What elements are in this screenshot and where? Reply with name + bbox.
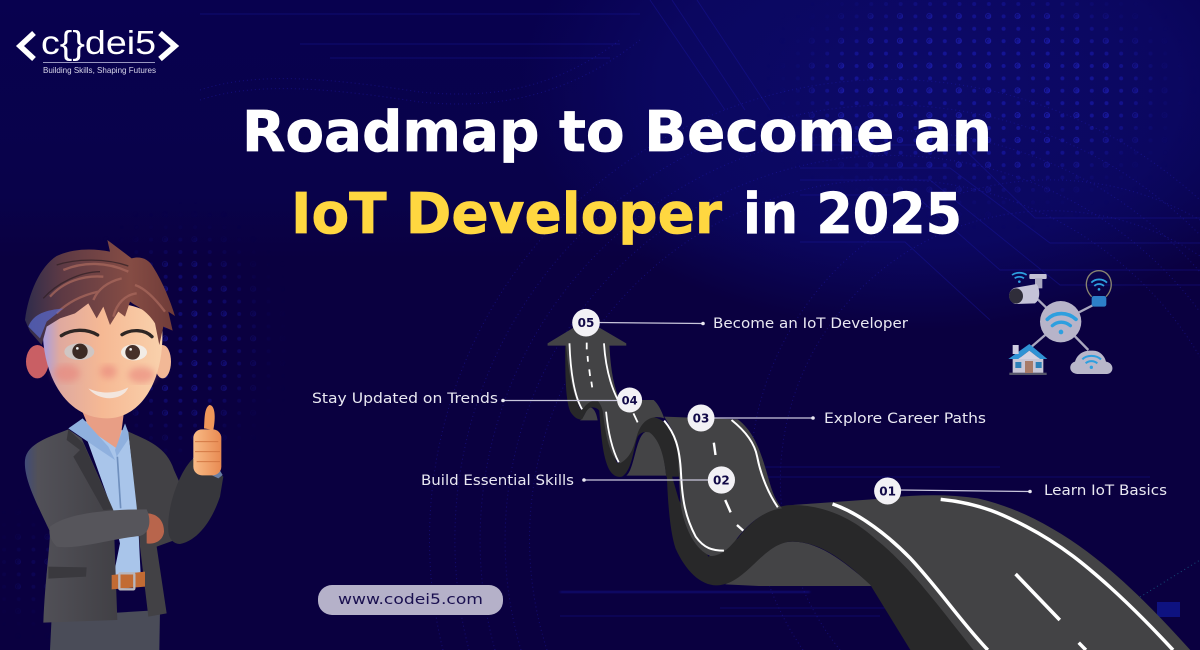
segment 4 surface — [597, 400, 664, 463]
central wifi symbol — [1047, 314, 1076, 334]
house — [1008, 344, 1047, 375]
label: step 01: Learn IoT Basics — [1044, 483, 1167, 499]
label: step 03: Explore Career Paths — [824, 411, 986, 427]
step 01 marker — [874, 478, 901, 504]
mouth — [88, 387, 128, 398]
icon: IoT network — [1008, 271, 1112, 375]
cheeks — [53, 365, 155, 383]
website pill — [318, 585, 503, 615]
step 02 marker — [708, 466, 735, 494]
title: Roadmap to Become an — [242, 100, 992, 165]
pocket flap — [48, 567, 87, 579]
title: IoT Developer — [291, 182, 722, 247]
character: thumbs-up developer — [25, 240, 223, 650]
logo: codei5 — [20, 24, 175, 75]
jacket left — [25, 429, 117, 623]
lane markings — [569, 343, 1173, 650]
step 04 marker: 04 — [622, 393, 638, 407]
logo chevrons and wordmark: c{}dei5 — [41, 24, 156, 61]
thumbs-up hand — [193, 405, 221, 475]
segment 5 surface with arrow head — [548, 320, 626, 410]
trousers — [50, 610, 160, 650]
road underside shapes — [580, 407, 872, 586]
title — [242, 100, 992, 247]
collar — [68, 418, 130, 460]
hair — [25, 240, 175, 345]
ear left — [26, 345, 49, 378]
eyes — [64, 343, 147, 360]
label: step 02: Build Essential Skills — [421, 473, 574, 489]
segment 1 surface — [793, 495, 1190, 650]
step 04 marker — [617, 388, 642, 412]
step 03 marker — [688, 404, 714, 432]
step 01 marker: 01 — [879, 484, 896, 498]
jacket right — [128, 432, 180, 617]
cloud — [1070, 351, 1112, 374]
road fold dark bands — [565, 345, 974, 650]
step 05 marker: 05 — [578, 316, 594, 330]
step 02 marker: 02 — [713, 473, 730, 487]
belt — [112, 572, 145, 589]
neck — [82, 410, 124, 448]
camera — [1009, 273, 1047, 304]
logo chevrons and wordmark — [20, 24, 175, 61]
eyebrows — [61, 330, 152, 337]
segment 3 surface — [664, 417, 782, 556]
logo tagline: Building Skills, Shaping Futures — [43, 65, 156, 75]
crossed hand — [147, 513, 164, 544]
title: in 2025 — [743, 182, 962, 247]
crossed arm — [49, 509, 149, 547]
bulb — [1086, 271, 1111, 307]
step 05 marker — [572, 309, 600, 337]
raised arm — [168, 458, 223, 544]
connector lines — [501, 322, 1032, 493]
head — [43, 302, 162, 418]
hair strands — [50, 264, 165, 317]
shirt — [80, 420, 141, 577]
label: step 05: Become an IoT Developer — [713, 316, 908, 332]
step 03 marker: 03 — [693, 411, 709, 425]
ear right — [154, 345, 171, 378]
website pill: www.codei5.com — [338, 592, 483, 608]
road — [548, 320, 1190, 650]
label: step 04: Stay Updated on Trends — [312, 391, 498, 407]
